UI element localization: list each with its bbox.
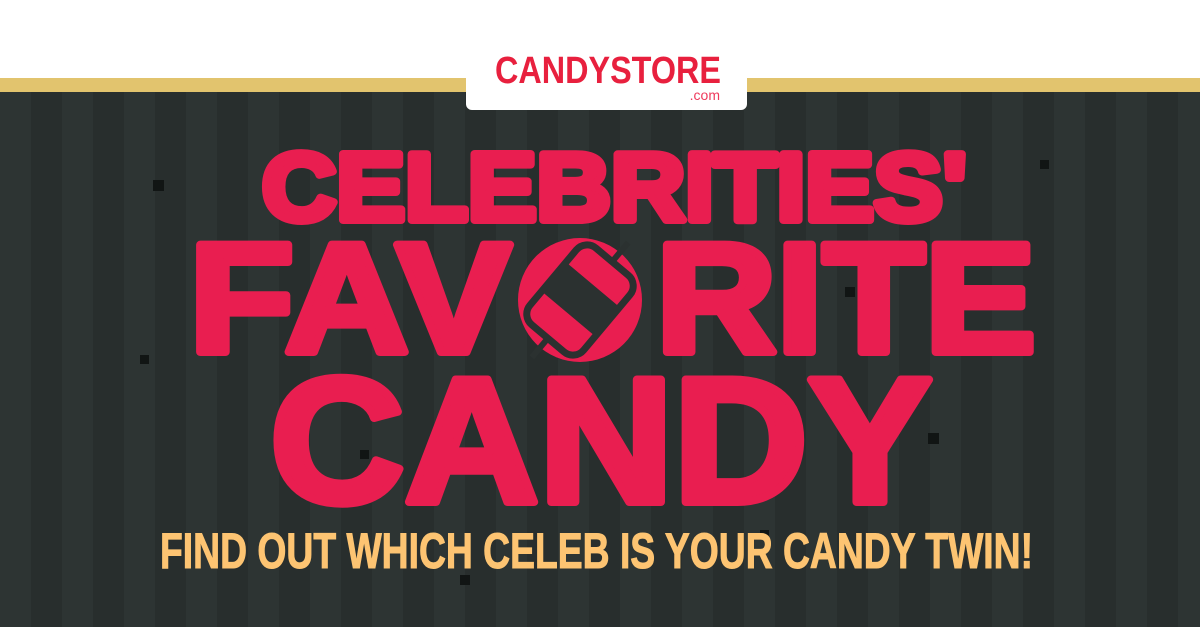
logo box: .com	[690, 87, 720, 103]
title line 2 left: FAV	[189, 212, 511, 386]
title line 1: CELEBRITIES'	[262, 134, 967, 241]
gold band	[0, 78, 1200, 92]
icon: candy O	[505, 220, 655, 380]
title	[189, 134, 1036, 540]
title line 3: CANDY	[270, 341, 932, 540]
title line 2 right: RITE	[656, 212, 1036, 386]
logo box: CANDYSTORE	[495, 50, 721, 92]
logo box	[466, 38, 747, 110]
confetti	[140, 160, 1049, 585]
